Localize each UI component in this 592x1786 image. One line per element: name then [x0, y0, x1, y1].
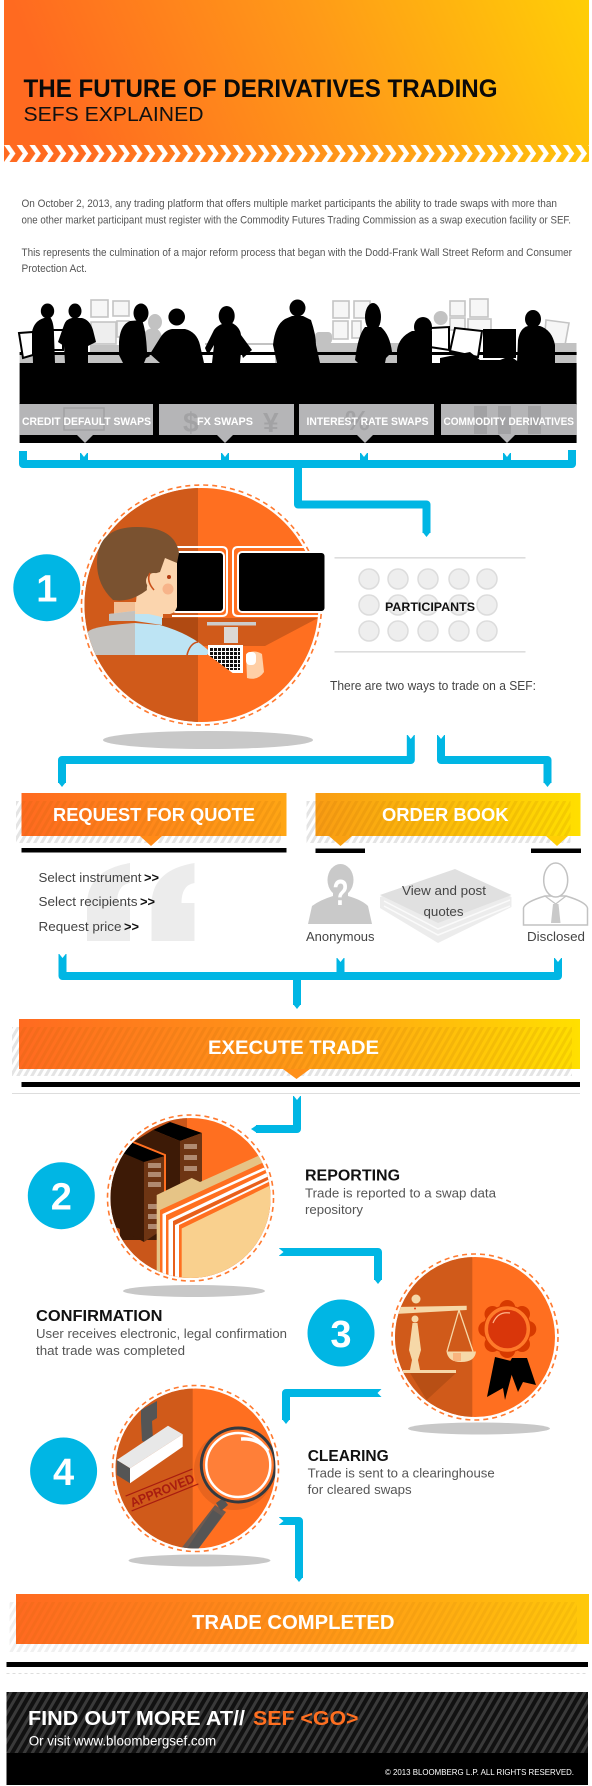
laptops and front monitors [19, 327, 515, 358]
step 4 badge [30, 1438, 97, 1504]
participants panel: PARTICIPANTS [385, 600, 475, 614]
swap categories bar: INTEREST RATE SWAPS [306, 416, 428, 428]
trading floor silhouettes [19, 299, 577, 405]
clearing text: CLEARING [308, 1448, 389, 1465]
people [32, 300, 555, 363]
subtitle: SEFS EXPLAINED [24, 103, 204, 126]
panel: request for quote heading: REQUEST FOR QUOTE [53, 804, 255, 825]
quote mark icon and request steps: Select recipients [38, 894, 138, 909]
icon: book with view and post quotes: quotes [424, 904, 464, 919]
icon: disclosed person [524, 863, 588, 944]
quote mark icon and request steps: Request price [38, 919, 122, 934]
step 3 badge: 3 [330, 1314, 352, 1356]
swap categories bar: FX SWAPS [197, 416, 253, 428]
arrow: merge into execute trade [58, 953, 562, 1009]
footer panel: SEF <GO> [253, 1708, 358, 1730]
head [114, 602, 163, 618]
icon: disclosed person: Disclosed [527, 929, 585, 944]
reporting text [305, 1168, 496, 1217]
step 4 illustration: approval stamp and magnifier [110, 1385, 278, 1566]
divider bar [6, 1662, 588, 1674]
keyboard [208, 645, 243, 673]
reporting text: Trade is reported to a swap data [305, 1187, 496, 1201]
arrow: categories bracket to participants [23, 450, 572, 537]
ribbon [487, 1357, 512, 1400]
intro text block: On October 2, 2013, any trading platform that offers multiple market participants the ability to trade swaps with more than [22, 198, 557, 210]
reporting text: repository [305, 1203, 364, 1217]
front building [110, 1143, 144, 1242]
step 1 badge [13, 554, 80, 621]
stamp [117, 1401, 183, 1483]
panel: execute trade heading: EXECUTE TRADE [208, 1037, 379, 1059]
monitors [172, 552, 326, 612]
quote mark icon and request steps: >> [144, 870, 159, 885]
title: THE FUTURE OF DERIVATIVES TRADING [24, 75, 498, 103]
arrow: reporting to confirmation [278, 1248, 382, 1284]
step 1 illustration: trader at desk [80, 480, 326, 749]
swap categories bar: $ [183, 407, 199, 438]
monitor stand [207, 622, 256, 626]
desk shadow [198, 618, 318, 646]
icon: anonymous person [306, 864, 375, 944]
arrow: clearing to trade completed [278, 1516, 303, 1582]
copyright: © 2013 BLOOMBERG L.P. ALL RIGHTS RESERVED. [385, 1767, 574, 1777]
swap categories bar [20, 403, 577, 443]
panel: execute trade heading [12, 1019, 580, 1094]
desk line and black band [20, 352, 577, 355]
step 3 badge [308, 1300, 374, 1366]
folder [156, 1156, 266, 1273]
arrow: split to request for quote and order book [58, 734, 552, 787]
icon: anonymous person: Anonymous [306, 929, 375, 944]
quote mark icon and request steps: >> [124, 919, 139, 934]
reporting text: REPORTING [305, 1168, 400, 1185]
step 2 illustration: data repository [106, 1114, 274, 1297]
magnifier shadow and glass [194, 1436, 270, 1510]
panel: order book heading [306, 793, 581, 853]
call to action: FIND OUT MORE AT// [28, 1708, 245, 1730]
step 2 badge [28, 1162, 95, 1229]
approved mark: APPROVED [128, 1471, 197, 1510]
quote mark icon and request steps: >> [140, 894, 155, 909]
panel: order book heading: ORDER BOOK [382, 804, 509, 825]
confirmation text: User receives electronic, legal confirmation [36, 1327, 287, 1341]
participants panel [334, 557, 526, 653]
arrow: execute trade to reporting [251, 1095, 301, 1133]
step 1 badge: 1 [36, 568, 57, 610]
step 4 badge: 4 [53, 1452, 74, 1494]
swap categories bar: ¥ [263, 407, 279, 438]
swap categories bar: CREDIT DEFAULT SWAPS [22, 416, 151, 428]
panel: trade completed heading [10, 1594, 589, 1652]
step 3 illustration: scales and seal [390, 1250, 558, 1434]
clearing text [308, 1448, 495, 1497]
confirmation text: that trade was completed [36, 1344, 185, 1358]
hand [246, 652, 264, 679]
icon: book with view and post quotes [380, 869, 512, 943]
clearing text: for cleared swaps [308, 1483, 412, 1497]
quote mark icon and request steps [38, 863, 194, 941]
panel: trade completed heading: TRADE COMPLETED [192, 1612, 394, 1634]
shadow [103, 731, 313, 749]
icon: anonymous person: ? [332, 872, 348, 913]
background monitors and desk [91, 299, 569, 345]
website: Or visit www.bloombergsef.com [29, 1733, 216, 1749]
quote mark icon and request steps: Select instrument [38, 870, 142, 885]
panel: request for quote heading [16, 793, 286, 852]
intro text block [22, 198, 572, 275]
icon: book with view and post quotes: View and post [402, 883, 486, 898]
seal [478, 1300, 536, 1358]
back building [153, 1122, 202, 1141]
confirmation text [36, 1308, 287, 1358]
step 2 badge: 2 [51, 1176, 72, 1218]
swap categories bar: COMMODITY DERIVATIVES [444, 416, 574, 428]
intro text block: Protection Act. [22, 263, 87, 275]
two ways text: There are two ways to trade on a SEF: [330, 679, 536, 693]
clearing text: Trade is sent to a clearinghouse [308, 1466, 495, 1480]
footer panel [6, 1692, 588, 1785]
header banner [4, 0, 589, 162]
scales [395, 1306, 467, 1314]
swap categories bar: % [345, 405, 370, 436]
shirt [88, 623, 135, 660]
confirmation text: CONFIRMATION [36, 1308, 162, 1325]
arrow: confirmation to clearing [282, 1388, 382, 1424]
